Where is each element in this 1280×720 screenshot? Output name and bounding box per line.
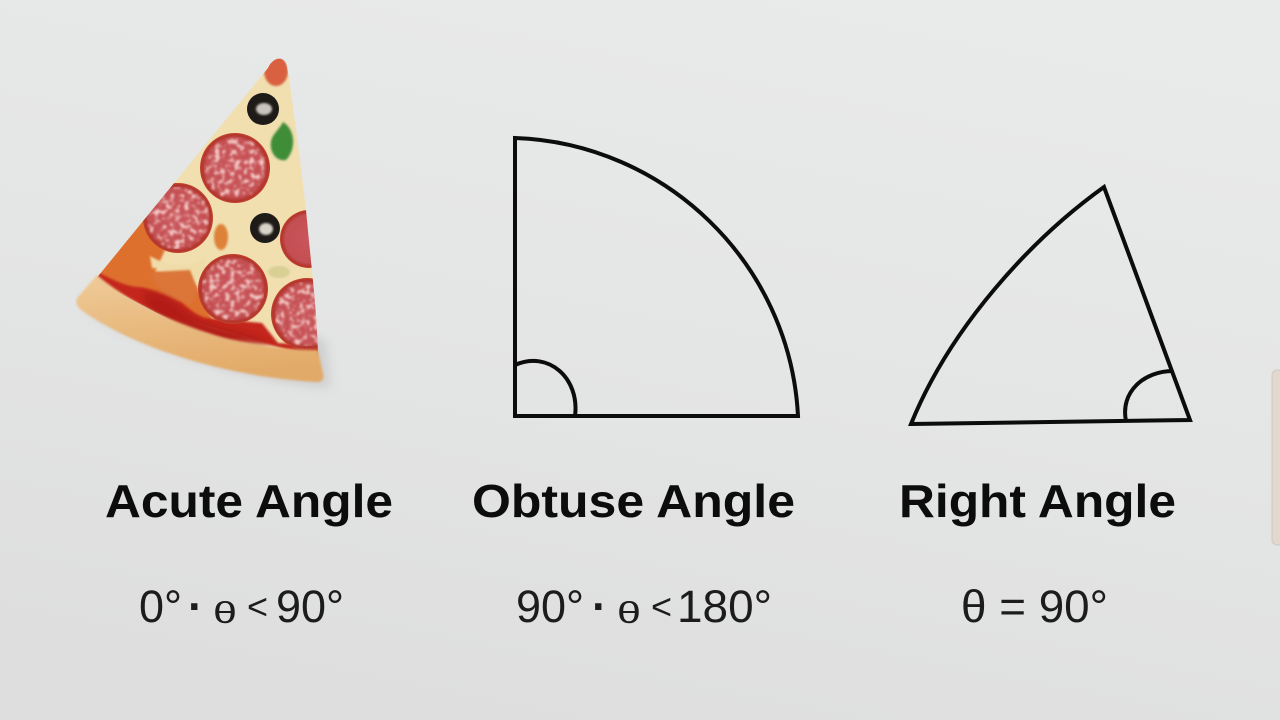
formula: obtuse range: 180°	[677, 581, 772, 632]
heading: obtuse angle: Obtuse Angle	[472, 475, 795, 527]
pepperoni	[143, 133, 318, 350]
olive	[247, 93, 279, 125]
green leaf	[271, 122, 293, 160]
formula: obtuse range: 90°	[516, 581, 584, 632]
formula: acute range: θ	[213, 595, 237, 630]
pizza slice illustration	[75, 58, 330, 388]
formula: obtuse range	[516, 581, 772, 632]
formula: obtuse range: <	[651, 586, 672, 627]
formula: right angle: θ = 90°	[961, 581, 1108, 632]
formula: obtuse range: θ	[617, 595, 641, 630]
formula: acute range	[139, 581, 344, 632]
pizza cheese and toppings	[96, 58, 318, 356]
heading: right angle: Right Angle	[899, 475, 1176, 527]
obtuse angle sector outline	[515, 138, 798, 416]
olive	[250, 213, 280, 243]
formula: acute range: <	[247, 586, 268, 627]
right angle sector outline	[911, 187, 1190, 424]
right edge object	[1272, 370, 1280, 545]
pizza crust	[76, 275, 323, 382]
formula: obtuse range: ·	[592, 581, 607, 632]
heading: acute angle: Acute Angle	[105, 475, 393, 527]
formula: acute range: 0°	[139, 581, 182, 632]
right angle marker	[1125, 371, 1173, 421]
formula: acute range: 90°	[276, 581, 344, 632]
obtuse angle marker	[515, 361, 576, 416]
formula: acute range: ·	[188, 581, 203, 632]
pizza shadow	[85, 285, 330, 388]
